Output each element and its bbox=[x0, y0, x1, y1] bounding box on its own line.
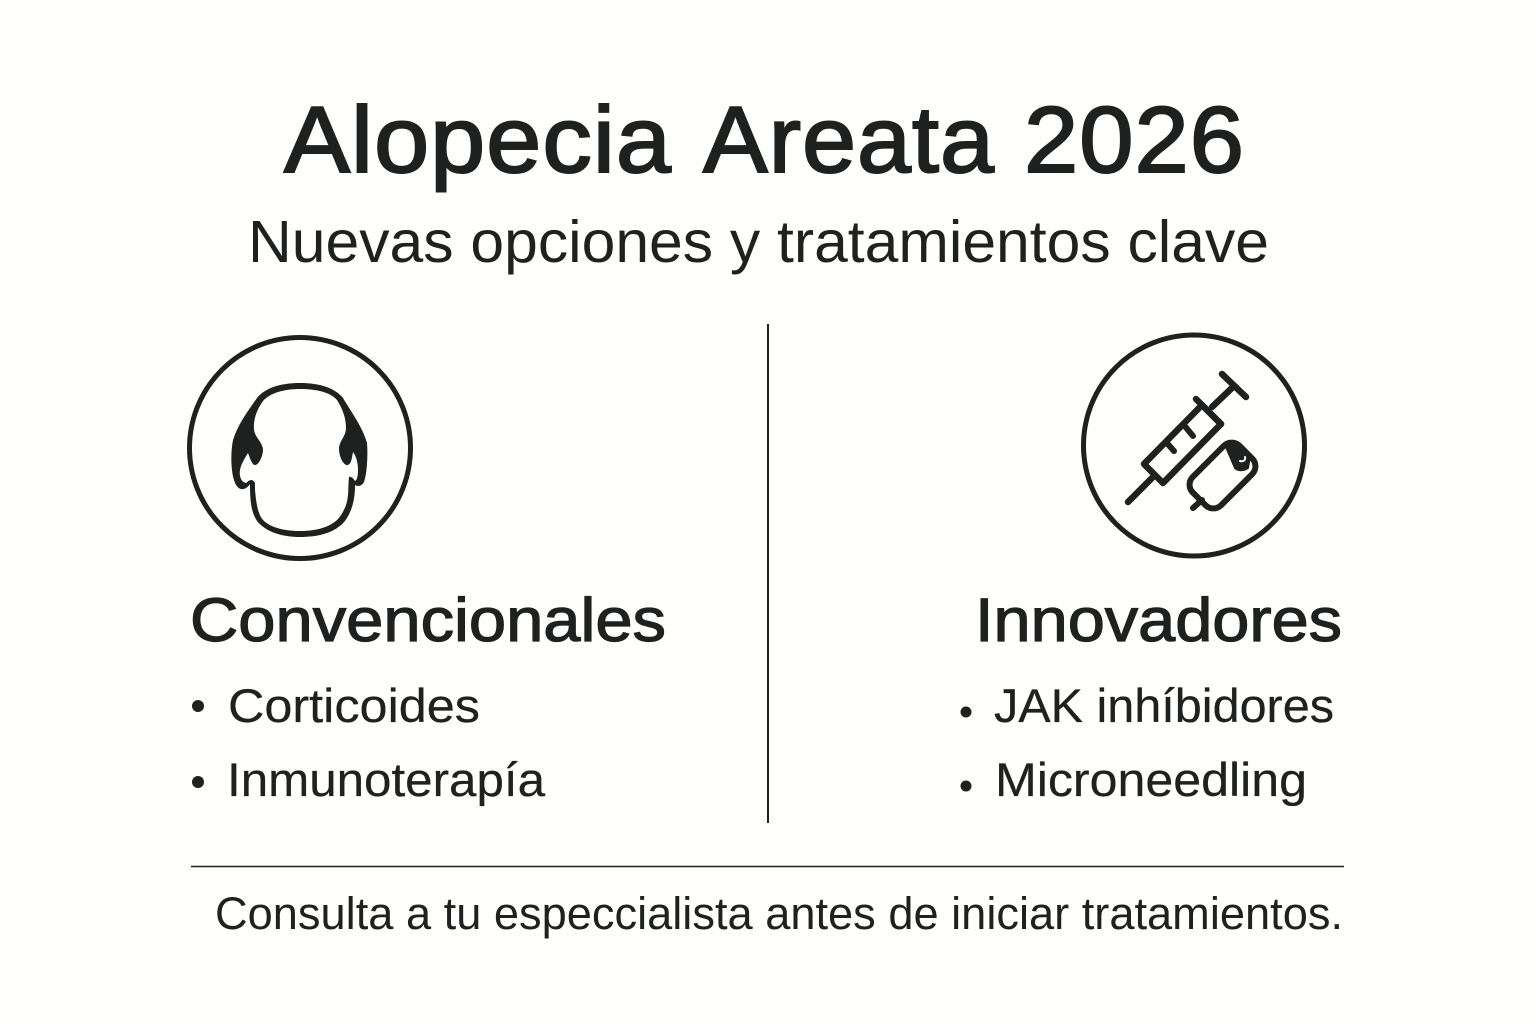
title: 2026 bbox=[1024, 87, 1245, 192]
bullet: JAK inhíbidores: JAK inhíbidores bbox=[994, 679, 1334, 732]
bullet: Corticoides: Corticoides bbox=[228, 679, 480, 732]
panel: innovadores bbox=[960, 335, 1342, 806]
icon: balding head bbox=[190, 338, 410, 558]
title bbox=[284, 87, 1245, 192]
bullet: Inmunoterapía: Inmunoterapía bbox=[227, 753, 546, 806]
horizontal divider bbox=[191, 866, 1344, 868]
footer note: Consulta a tu especcialista antes de iniciar tratamientos. bbox=[215, 888, 1343, 939]
icon: syringe and vial bbox=[1084, 335, 1304, 556]
panel: convencionales bbox=[190, 338, 666, 806]
vertical divider bbox=[767, 324, 769, 823]
subtitle: Nuevas opciones y tratamientos clave bbox=[248, 209, 1269, 275]
title: Alopecia bbox=[284, 87, 672, 192]
heading: Convencionales: Convencionales bbox=[190, 586, 666, 654]
bullet: Microneedling: Microneedling bbox=[995, 753, 1307, 806]
heading: Innovadores: Innovadores bbox=[975, 586, 1342, 654]
title: Areata bbox=[703, 87, 995, 192]
